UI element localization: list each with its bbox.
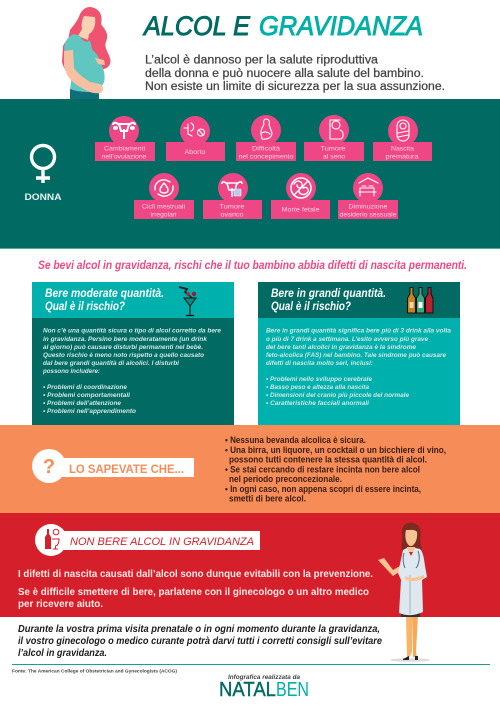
tag: non bere alcol: NON BERE ALCOL IN GRAVIDANZA bbox=[70, 536, 254, 548]
bullet list bbox=[225, 435, 446, 504]
item: tumore al seno: al seno bbox=[323, 154, 345, 160]
bullet list: • Se stai cercando di restare incinta non bere alcol bbox=[225, 464, 420, 474]
item: cambiamenti nell'ovulazione bbox=[95, 116, 155, 161]
credit: Infografica realizzata da bbox=[228, 674, 301, 681]
tag: lo sapevate che: ? bbox=[43, 456, 55, 478]
intro text: L’alcol è dannoso per la salute riproduttiva bbox=[145, 54, 379, 66]
title: GRAVIDANZA bbox=[259, 11, 423, 41]
advice text: l’alcol in gravidanza. bbox=[18, 648, 107, 659]
panel text: difetti di nascita molto seri, inclusi: bbox=[266, 360, 373, 367]
bullet list: nel periodo preconcezionale. bbox=[229, 474, 342, 484]
item: cicli mestruali irregolari: irregolari bbox=[150, 212, 177, 218]
panel: donna bbox=[0, 99, 500, 249]
intro text: Non esiste un limite di sicurezza per la sua assunzione. bbox=[145, 81, 445, 93]
panel text: • Problemi comportamentali bbox=[43, 392, 130, 399]
illustration: pregnant woman bbox=[62, 7, 110, 99]
item: nascita prematura: Nascita bbox=[391, 146, 414, 152]
icon: female symbol bbox=[32, 146, 54, 183]
item: cicli mestruali irregolari: Cicli mestruali bbox=[142, 204, 186, 210]
panel text: dal bere grandi quantità di alcolici. I disturbi bbox=[43, 360, 179, 367]
panel text: in gravidanza. Persino bere moderatamente (un drink bbox=[43, 336, 208, 343]
panel: non bere alcol in gravidanza bbox=[0, 513, 500, 617]
panel heading: Qual è il rischio? bbox=[271, 299, 352, 313]
item: tumore ovarico: ovarico bbox=[220, 212, 244, 218]
logo: natalben: BEN bbox=[276, 679, 309, 701]
panel text: feto-alcolica (FAS) nel bambino. Tale sindrome può causare bbox=[266, 352, 447, 359]
panel: bere moderate quantità bbox=[32, 282, 234, 425]
panel text: del bere tanti alcolici in gravidanza è la sindrome bbox=[266, 344, 417, 351]
panel heading: Bere in grandi quantità. bbox=[271, 286, 386, 300]
item: cambiamenti nell'ovulazione: nell’ovulazione bbox=[102, 154, 147, 160]
panel: lo sapevate che bbox=[0, 425, 500, 513]
advice text: Durante la vostra prima visita prenatale o in ogni momento durante la gravidanza, bbox=[18, 624, 380, 635]
item: nascita prematura bbox=[373, 116, 432, 161]
item: morte fetale bbox=[271, 173, 330, 219]
prevention text: I difetti di nascita causati dall’alcol sono dunque evitabili con la prevenzione. bbox=[18, 569, 373, 580]
label: donna: DONNA bbox=[24, 192, 62, 202]
panel heading: Bere moderate quantità. bbox=[45, 286, 164, 300]
item: aborto: Aborto bbox=[184, 149, 206, 156]
panel text: Non c’è una quantità sicura o tipo di alcol corretto da bere bbox=[43, 328, 222, 335]
panel heading bbox=[271, 286, 386, 313]
advice text: il vostro ginecologo o medico curante potrà darvi tutti i corretti consigli sull’evitare bbox=[18, 636, 382, 647]
intro text: della donna e può nuocere alla salute del bambino. bbox=[145, 68, 424, 80]
item: aborto bbox=[166, 116, 225, 161]
panel text bbox=[266, 328, 452, 407]
intro text bbox=[145, 54, 445, 93]
panel text: • Caratteristiche facciali anormali bbox=[266, 400, 369, 407]
panel text: • Problemi nell’apprendimento bbox=[43, 408, 136, 415]
panel text: o più di 7 drink a settimana. L’esito avverso più grave bbox=[266, 336, 429, 343]
bullet list: smetti di bere alcol. bbox=[229, 494, 306, 504]
advice text bbox=[18, 624, 382, 659]
item: diminuzione desiderio sessuale: desiderio sessuale bbox=[340, 212, 397, 218]
panel: bere in grandi quantità bbox=[258, 282, 460, 425]
item: diminuzione desiderio sessuale bbox=[338, 173, 398, 219]
tag: lo sapevate che bbox=[32, 449, 194, 483]
logo: natalben bbox=[219, 679, 309, 701]
panel text: • Problemi nello sviluppo cerebrale bbox=[266, 376, 373, 383]
panel text: Bere in grandi quantità significa bere più di 3 drink alla volta bbox=[266, 328, 452, 335]
source: Fonte: The American College of Obstetrician and Gynecologists (ACOG) bbox=[12, 669, 177, 675]
title: ALCOL E bbox=[142, 11, 251, 41]
panel heading: Qual è il rischio? bbox=[45, 299, 126, 313]
bullet list: • Una birra, un liquore, un cocktail o un bicchiere di vino, bbox=[225, 445, 446, 455]
item: nascita prematura: prematura bbox=[386, 154, 419, 160]
bullet list: • Nessuna bevanda alcolica è sicura. bbox=[225, 435, 366, 445]
panel text bbox=[42, 328, 222, 415]
panel heading bbox=[45, 286, 164, 313]
bullet list: • In ogni caso, non appena scopri di essere incinta, bbox=[225, 484, 421, 494]
icon: bottles bbox=[408, 288, 433, 313]
prevention text: per ricevere aiuto. bbox=[18, 599, 103, 610]
item: tumore al seno bbox=[304, 115, 364, 161]
panel text: • Problemi di coordinazione bbox=[43, 384, 128, 391]
item: tumore al seno: Tumore bbox=[320, 146, 346, 152]
item: tumore ovarico: Tumore bbox=[220, 204, 245, 210]
item: diminuzione desiderio sessuale: Diminuzione bbox=[348, 204, 388, 210]
logo: natalben: NATAL bbox=[219, 679, 276, 701]
prevention text bbox=[18, 569, 373, 610]
item: difficolta nel concepimento: nel concepimento bbox=[238, 154, 294, 160]
item: morte fetale: Morte fetale bbox=[282, 206, 320, 214]
prevention text: Se è difficile smettere di bere, parlatene con il ginecologo o un altro medico bbox=[18, 587, 369, 598]
item: difficolta nel concepimento bbox=[236, 115, 296, 161]
illustration: doctor bbox=[378, 523, 430, 662]
icon: cocktail bbox=[179, 287, 196, 316]
panel text: • Dimensioni del cranio più piccole del normale bbox=[266, 392, 410, 399]
panel text: • Problemi dell’attenzione bbox=[43, 400, 122, 407]
tag: non bere alcol bbox=[35, 524, 260, 556]
tag: lo sapevate che: LO SAPEVATE CHE... bbox=[69, 464, 184, 476]
item: cambiamenti nell'ovulazione: Cambiamenti bbox=[104, 146, 146, 152]
title bbox=[142, 11, 423, 41]
panel text: possono includere: bbox=[42, 368, 100, 375]
item: cicli mestruali irregolari bbox=[134, 173, 194, 219]
item: difficolta nel concepimento: Difficoltà bbox=[252, 146, 280, 152]
panel text: al giorno) può causare disturbi permanenti nel bebè. bbox=[43, 344, 203, 351]
panel text: • Basso peso e altezza alla nascita bbox=[266, 384, 370, 391]
bullet list: possono tutti contenere la stessa quantità di alcol. bbox=[229, 454, 427, 464]
panel text: Questo rischio è meno noto rispetto a quello causato bbox=[43, 352, 204, 359]
item: tumore ovarico bbox=[203, 173, 262, 219]
